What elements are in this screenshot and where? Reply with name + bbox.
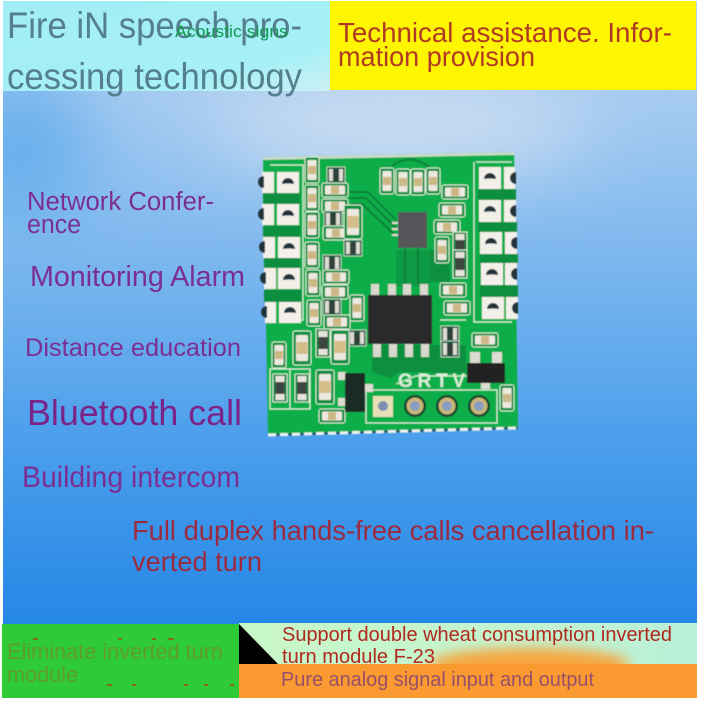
text: monitoring alarm: Monitoring Alarm [30,261,245,293]
panel: title background [3,1,330,91]
icon: black triangle [239,624,278,664]
panel: technical assistance [330,1,696,90]
panel: eliminate inverted turn module: Eliminate inverted turn [7,639,223,664]
text: building intercom: Building intercom [22,461,240,494]
text: bluetooth call: Bluetooth call [27,393,242,433]
text: full duplex description: verted turn [132,546,262,577]
main IC: SOP-8 [368,284,432,357]
title: Fire iN speech pro- [7,5,302,46]
left small IC [338,372,373,412]
text: full duplex description: Full duplex hands-free calls cancellation in- [132,515,654,546]
overlaid green subtitle: Acoustic signs [175,22,288,41]
text: network conference: ence [27,211,81,239]
left edge pads and holes [258,172,301,323]
panel: technical assistance: mation provision [338,41,535,72]
darker copper regions [263,189,518,378]
panel: support double wheat [239,623,697,698]
label: GRTV: GRTV [398,371,465,392]
panel: eliminate inverted turn module: module [7,662,78,687]
board [263,152,518,435]
text: full duplex description [132,515,654,577]
title [7,5,302,97]
copper traces and silkscreen outlines [350,159,430,284]
panel: eliminate inverted turn module [2,624,239,698]
header connector holes [373,395,490,417]
panel: technical assistance: Technical assistance. Infor- [338,17,672,48]
small QFN chip [392,212,427,248]
text: network conference: Network Confer- [27,188,214,216]
text: pure analog signal: Pure analog signal input and output [281,669,594,691]
panel: support double wheat: Support double wheat consumption inverted [282,623,672,646]
text: network conference [27,188,214,239]
text: distance education: Distance education [25,334,241,362]
right edge pads and holes [479,167,518,319]
right transistor [467,352,505,389]
title: cessing technology [7,56,302,97]
small components [272,157,514,423]
application list [22,188,245,494]
panel: support double wheat: turn module F-23 [282,645,435,668]
circuit board module [258,152,518,435]
